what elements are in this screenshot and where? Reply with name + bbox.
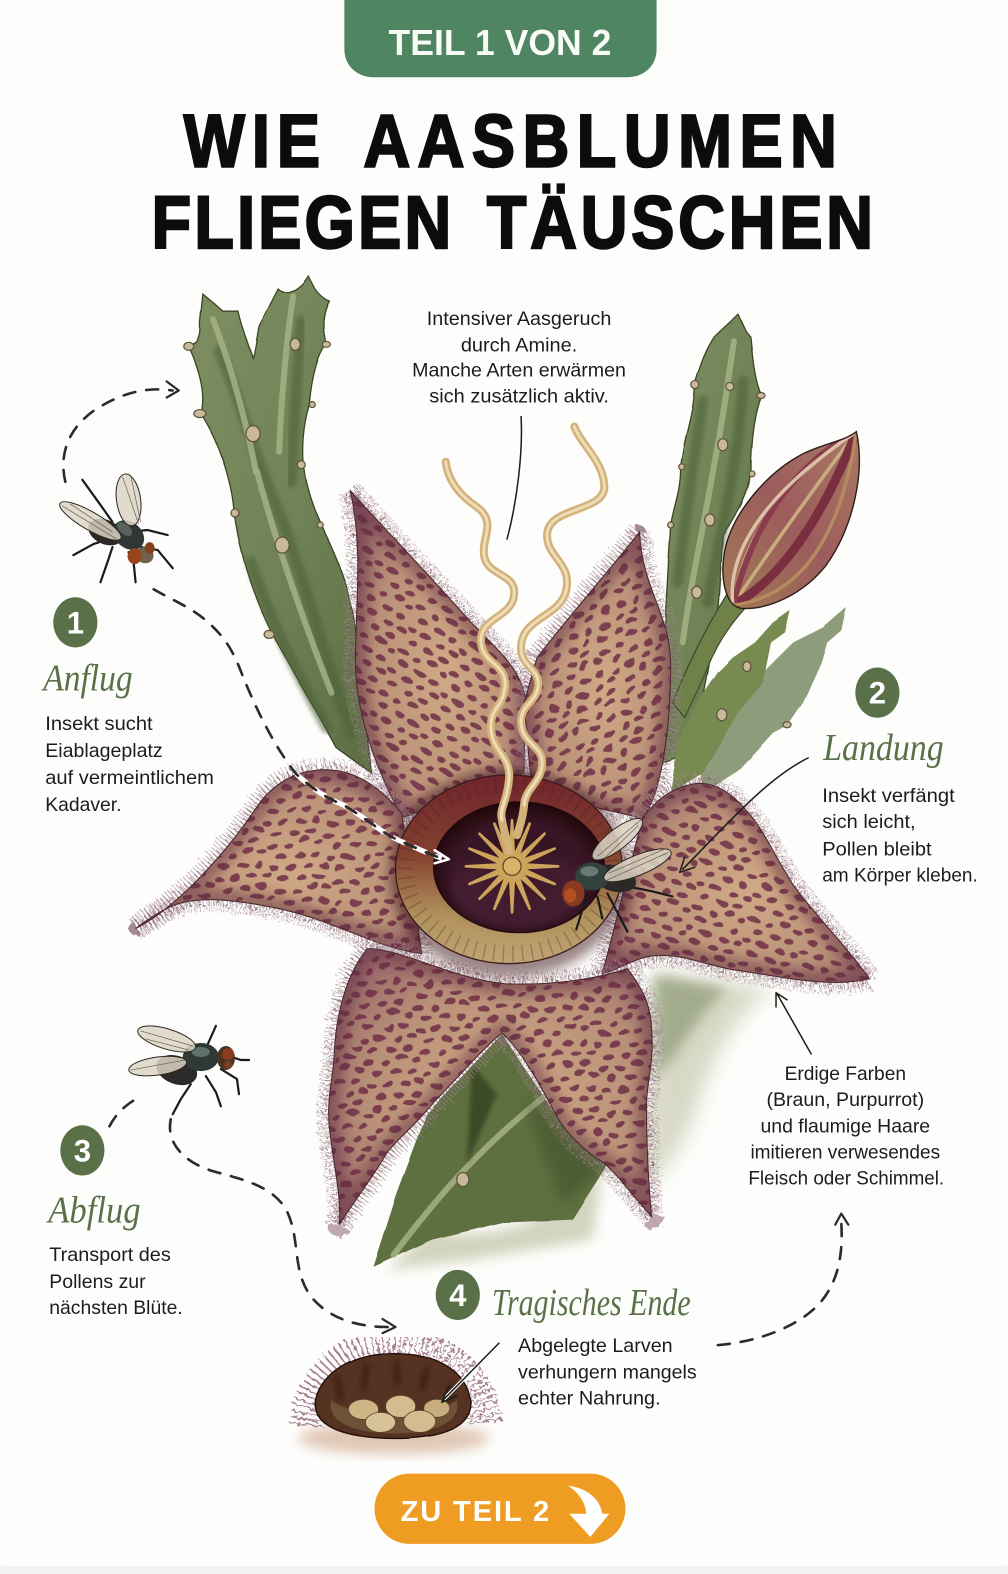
banner: Teil 1 von 2 (344, 0, 657, 77)
step 4: Tragisches Ende: verhungern mangels (518, 1361, 697, 1383)
text: colour note: imitieren verwesendes (750, 1141, 940, 1163)
step 3: Abflug: Transport des (49, 1244, 171, 1266)
flight path: pit to colour note (718, 1214, 848, 1345)
button: Zu Teil 2: ZU TEIL 2 (401, 1496, 549, 1528)
flower petal: right (602, 783, 869, 982)
title: FLIEGEN (152, 181, 451, 264)
title (152, 99, 873, 264)
step 3: Abflug: 3 (74, 1133, 91, 1168)
flower petal: left (136, 770, 422, 954)
step 1: Anflug (41, 597, 214, 816)
icon: fly in flight, top left (55, 472, 173, 582)
flight path: fly to pit (170, 1119, 396, 1333)
text: colour note: Fleisch oder Schimmel. (748, 1168, 944, 1190)
step 2: Landung: Pollen bleibt (822, 838, 932, 860)
illustration: right cactus stem (663, 314, 765, 763)
step 2: Landung: Insekt verfängt (822, 785, 955, 807)
step 2: Landung: am Körper kleben. (822, 864, 978, 886)
text: smell note: durch Amine. (461, 334, 577, 356)
icon: fly taking off, left (128, 1021, 249, 1114)
step 3: Abflug: Pollens zur (49, 1271, 146, 1293)
step 2: Landung: Landung (822, 727, 944, 769)
text: colour note: (Braun, Purpurrot) (767, 1089, 924, 1111)
illustration: green stem under flower (374, 974, 773, 1270)
step 4: Tragisches Ende: Tragisches Ende (492, 1282, 691, 1324)
step 3: Abflug (46, 1125, 183, 1319)
step 1: Anflug: Anflug (41, 658, 133, 700)
step 2: Landung (822, 668, 978, 886)
step 3: Abflug: Abflug (46, 1190, 141, 1232)
flower petal: top right (524, 532, 671, 818)
step 4: Tragisches Ende: Abgelegte Larven (518, 1335, 673, 1357)
leader: landing (680, 758, 808, 872)
step 1: Anflug: Insekt sucht (45, 713, 153, 735)
flight path: to badge 3 (109, 1096, 142, 1126)
text: smell note: Intensiver Aasgeruch (427, 308, 611, 330)
illustration: pit with larvae (298, 1345, 489, 1455)
step 1: Anflug: auf vermeintlichem (45, 767, 214, 789)
icon: fly on flower (562, 812, 675, 932)
text: colour note: und flaumige Haare (760, 1115, 930, 1137)
text: colour note (748, 1063, 944, 1190)
text: colour note: Erdige Farben (785, 1063, 906, 1085)
step 4: Tragisches Ende: echter Nahrung. (518, 1387, 661, 1409)
step 2: Landung: 2 (869, 676, 886, 711)
text: smell note: sich zusätzlich aktiv. (429, 386, 609, 408)
illustration: bud and stem (673, 432, 859, 718)
scent wisps (446, 427, 604, 851)
step 1: Anflug: Eiablageplatz (45, 740, 163, 762)
flower petal: bottom (329, 949, 652, 1225)
step 1: Anflug: 1 (67, 605, 84, 640)
flight path: to cactus (63, 381, 179, 482)
title: TÄUSCHEN (487, 181, 873, 264)
illustration: left cactus stem (184, 276, 371, 773)
banner: Teil 1 von 2: TEIL 1 VON 2 (389, 22, 611, 63)
step 1: Anflug: Kadaver. (45, 794, 122, 816)
step 4: Tragisches Ende (436, 1270, 697, 1409)
title: AASBLUMEN (363, 99, 837, 183)
title: WIE (184, 99, 320, 183)
text: smell note (412, 308, 626, 408)
button: Zu Teil 2 (375, 1474, 625, 1544)
leader: colour note (776, 993, 811, 1054)
leader: scent (507, 417, 521, 539)
leader: larvae (442, 1343, 499, 1402)
flight path: fly into flower (154, 589, 449, 863)
flower petal: top left (350, 491, 525, 818)
step 4: Tragisches Ende: 4 (449, 1278, 467, 1313)
text: smell note: Manche Arten erwärmen (412, 359, 626, 381)
flower centre: corona ring (389, 769, 629, 978)
step 3: Abflug: nächsten Blüte. (49, 1297, 183, 1319)
illustration: faded leaves (671, 607, 846, 793)
step 2: Landung: sich leicht, (822, 811, 916, 833)
flower centre: golden star (466, 820, 558, 912)
